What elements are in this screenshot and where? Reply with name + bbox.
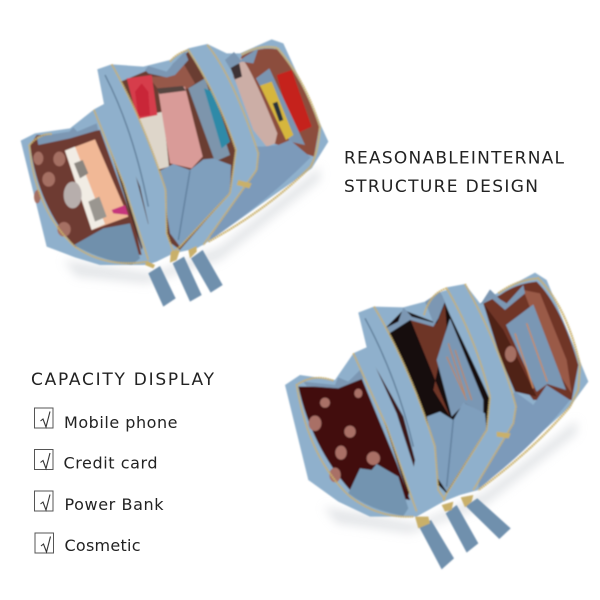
heading: capacity display: CAPACITY DISPLAY <box>31 370 215 390</box>
item: cosmetic <box>35 533 140 555</box>
item: mobile phone <box>34 408 178 432</box>
product photo: empty open bag <box>285 273 588 569</box>
heading: internal structure: REASONABLEINTERNAL <box>344 148 565 168</box>
capacity list <box>34 408 178 555</box>
right compartment <box>478 278 580 490</box>
zipper pulls <box>415 495 511 569</box>
heading: internal structure <box>344 148 565 197</box>
left compartment <box>29 103 157 265</box>
middle compartment <box>358 284 516 502</box>
right compartment <box>208 47 320 242</box>
item: mobile phone: Mobile phone <box>64 413 178 432</box>
item: credit card <box>34 450 158 472</box>
zipper pulls <box>145 246 223 307</box>
item: power bank <box>34 491 164 514</box>
bag silhouette <box>285 273 588 517</box>
middle compartment <box>97 45 258 253</box>
left compartment <box>297 347 427 517</box>
item: power bank: Power Bank <box>64 495 164 514</box>
item: cosmetic: Cosmetic <box>64 536 140 555</box>
product photo: open bag with items <box>21 39 328 307</box>
heading: internal structure: STRUCTURE DESIGN <box>344 177 538 197</box>
bag silhouette <box>21 39 328 265</box>
item: credit card: Credit card <box>64 454 158 472</box>
